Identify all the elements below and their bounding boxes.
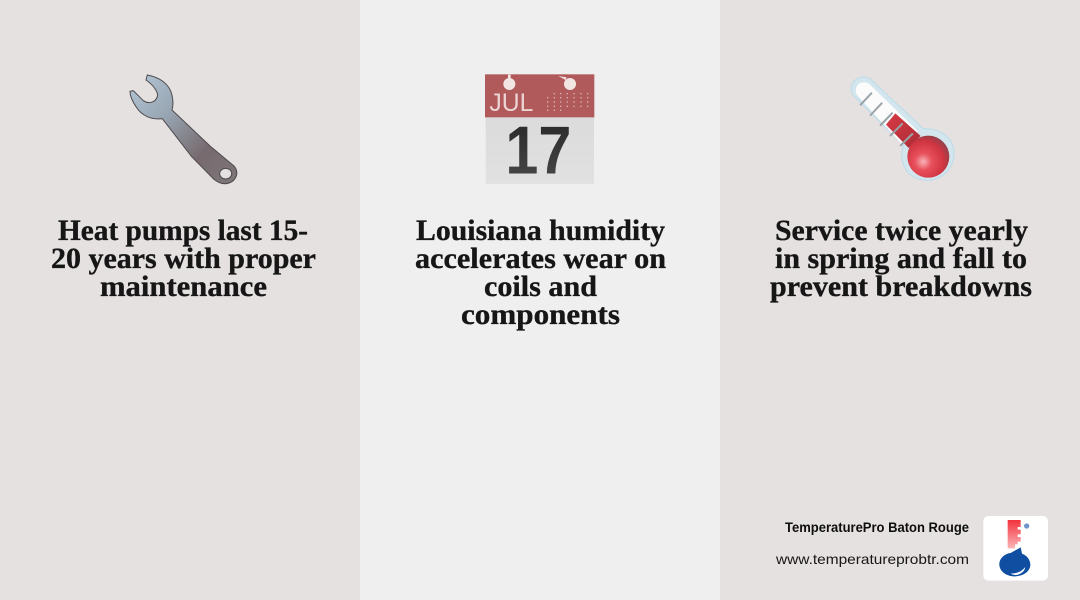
- icon: wrench: [130, 75, 237, 184]
- logo drop highlight: [1011, 567, 1025, 575]
- heading: left column: Heat pumps last 15-: [58, 214, 308, 247]
- heading: left column: maintenance: [100, 270, 267, 303]
- heading: center column: Louisiana humidity: [416, 214, 665, 247]
- red bulb: [907, 136, 949, 178]
- logo blue drop: [999, 547, 1030, 576]
- mini month grid: [547, 93, 588, 111]
- white tube interior: [856, 82, 918, 144]
- month label: JUL: [489, 89, 533, 117]
- logo thermometer scale: [1008, 520, 1021, 548]
- panel: center background: [360, 0, 720, 600]
- icon: calendar July 17: [485, 74, 594, 188]
- heading: center column: accelerates wear on: [415, 242, 666, 275]
- footer: company name: TemperaturePro Baton Rouge: [785, 520, 969, 535]
- footer: website: www.temperatureprobtr.com: [775, 551, 969, 567]
- tick marks: [861, 93, 912, 145]
- heading: right column: Service twice yearly: [775, 214, 1028, 247]
- logo small dot: [1024, 523, 1029, 529]
- heading: left column: 20 years with proper: [51, 242, 316, 275]
- icon: thermometer: [851, 77, 954, 181]
- heading: center column: components: [461, 298, 620, 331]
- glass tube and bulb: [851, 77, 954, 181]
- heading: right column: in spring and fall to: [775, 242, 1027, 275]
- logo: [983, 516, 1048, 581]
- heading: right column: prevent breakdowns: [770, 270, 1032, 303]
- calendar page: [486, 117, 594, 184]
- red liquid column: [886, 113, 921, 148]
- logo tile: [983, 516, 1048, 581]
- panel: left background: [0, 0, 360, 600]
- panel: right background: [720, 0, 1080, 600]
- heading: center column: [415, 214, 666, 331]
- calendar header: [485, 74, 594, 117]
- heading: left column: [51, 214, 316, 303]
- binder rings: [503, 75, 576, 90]
- heading: right column: [770, 214, 1032, 303]
- heading: center column: coils and: [484, 270, 597, 303]
- day number: 17: [505, 112, 571, 188]
